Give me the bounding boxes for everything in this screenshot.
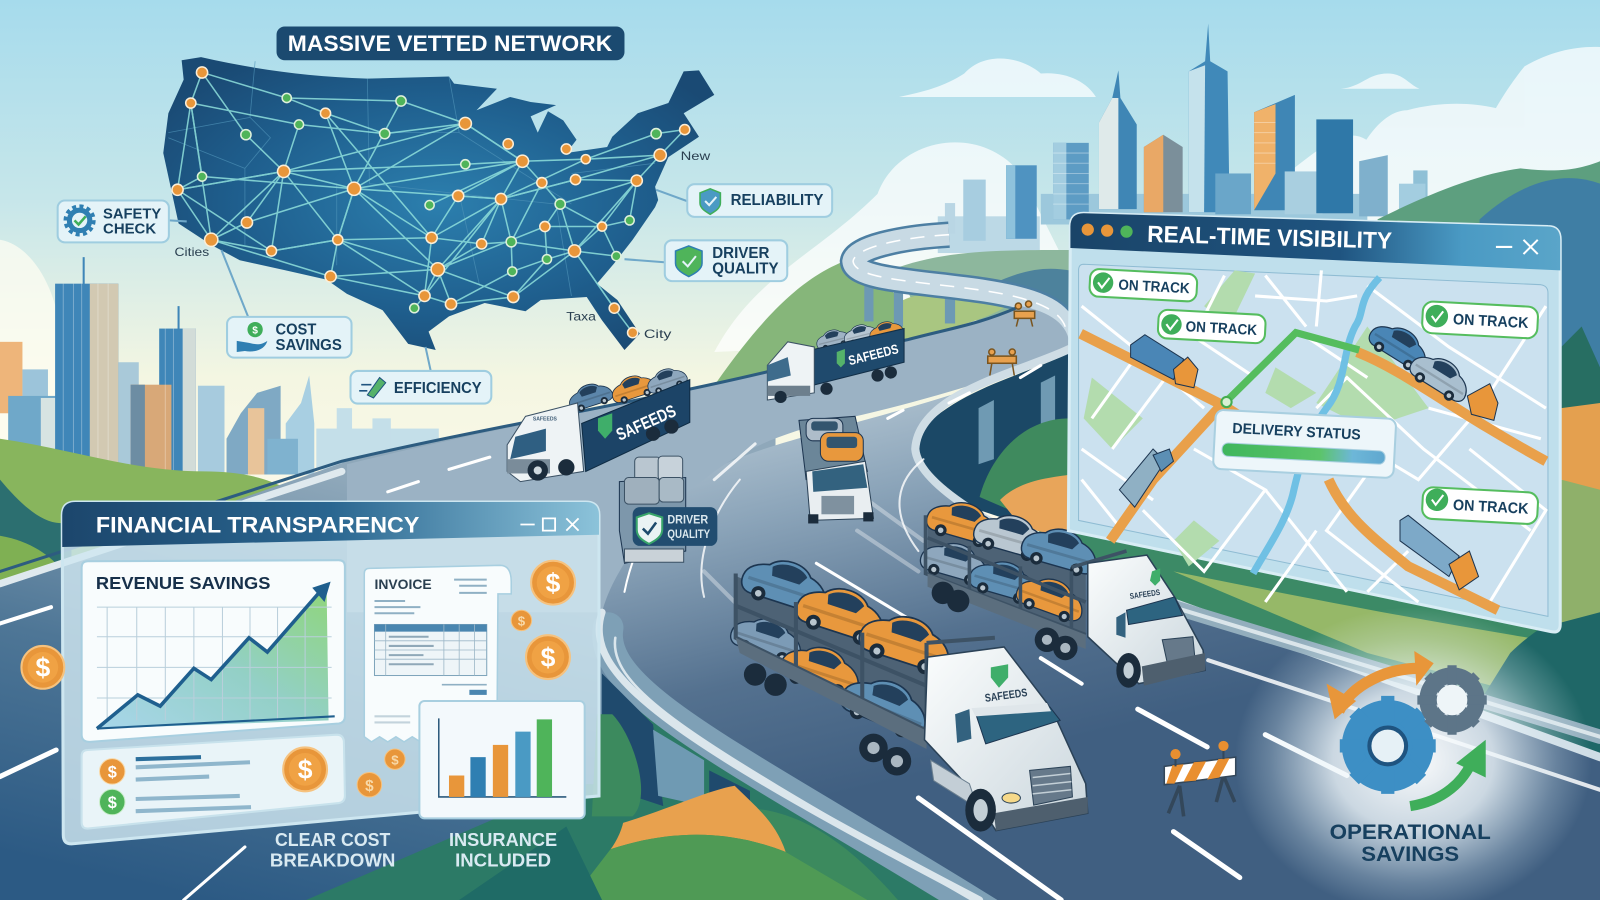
coin: $ [518,614,526,629]
ground below the overpass [306,653,1020,900]
left green hill [0,439,327,633]
tag: on track 3: ON TRACK [1453,311,1529,332]
coin: $ [391,752,399,767]
window header [1070,213,1560,270]
icon: gray gear [1417,665,1487,735]
coin [357,772,382,797]
tag: on track 3 [1422,301,1538,339]
truck: lower on map [1400,515,1479,590]
green route [1227,333,1359,401]
truck: right car carrier: SAFEEDS [1129,588,1161,601]
heading: operational savings: OPERATIONAL [1330,820,1491,844]
label: clear cost breakdown [270,829,395,870]
truck: large front carrier [727,549,1088,832]
icon: blue gear [1340,696,1436,794]
callout: efficiency: EFFICIENCY [394,380,482,397]
truck: upper distant carrier [767,318,905,403]
callout: reliability [687,184,832,217]
city labels: Cities [174,245,209,259]
label: insurance included: INCLUDED [455,849,551,870]
callout: safety check: CHECK [103,222,156,238]
city labels: New [681,149,710,163]
overpass supports [602,673,750,816]
heading: massive vetted network [277,27,624,60]
panel: massive vetted network map [163,57,714,370]
panel: operational savings [1235,607,1592,900]
callout: cost savings: COST [276,322,317,339]
card: cost lines: $ [108,764,117,782]
callout: cost savings [227,317,352,358]
skyline: left city [0,257,439,474]
window dots [1082,223,1133,238]
truck: carrier on map [1364,315,1498,420]
callout: safety check: SAFETY [103,206,161,222]
panel: financial transparency [62,502,599,844]
card: bar chart [419,701,585,818]
card: cost lines: $ [298,755,313,785]
road edge rails [0,306,1600,900]
window controls [520,518,579,531]
label: insurance included [449,829,557,870]
heading: real-time visibility: REAL-TIME VISIBILITY [1147,221,1393,254]
right hillside behind panel [969,327,1600,806]
card: cost lines [82,735,345,829]
coin on road: $ [35,653,50,683]
card: invoice [364,565,511,742]
callout: driver quality: DRIVER [712,245,769,262]
window header [62,502,599,547]
coin [385,749,405,769]
tag: on track 4: ON TRACK [1453,497,1529,518]
tag: on track 4 [1422,487,1538,524]
coin [531,561,575,605]
card: cost lines: $ [108,794,117,812]
delivery status card [1213,410,1396,478]
tag: driver quality [633,507,717,546]
foreground hill [306,714,898,900]
window frame [1068,213,1560,632]
truck: upper distant carrier: SAFEEDS [847,341,900,368]
city labels: Taxa [566,309,596,323]
truck: SAFEEDS navy trailer: SAFEEDS [533,416,558,422]
callout: cost savings: SAVINGS [276,337,342,354]
tag: on track 2: ON TRACK [1185,319,1258,339]
truck: blue box on map [1131,335,1198,388]
coin on road [21,646,64,689]
state borders [168,61,655,296]
barrier figures on road [988,301,1035,376]
truck: right car carrier [917,494,1205,688]
coin [511,610,532,631]
heading: operational savings [1330,820,1491,866]
truck: SAFEEDS navy trailer [507,363,690,482]
window controls [1496,240,1538,254]
icon: orange cycle arrow [1327,651,1434,719]
tag: on track 2 [1157,309,1266,344]
clouds [0,47,1600,469]
coin: $ [546,568,561,598]
city labels: City [644,327,673,341]
label: clear cost breakdown: CLEAR COST [275,829,391,850]
coin: $ [365,778,374,795]
callout: driver quality: QUALITY [712,260,779,277]
map view [1079,264,1548,616]
orange routes [1081,334,1546,610]
window frame [62,502,599,844]
map of the USA [163,57,714,350]
callout: efficiency [351,371,491,404]
network nodes [172,67,690,338]
lane markings [0,365,1600,900]
icon: green cycle arrow [1410,740,1486,806]
heading: massive vetted network: MASSIVE VETTED NETWORK [288,31,612,56]
white streets [1082,270,1546,602]
river [1253,278,1380,573]
tag: on track 1: ON TRACK [1118,278,1190,297]
card: revenue savings chart [82,560,345,742]
callout: driver quality [665,240,787,281]
logo: SAFEEDS shield [984,664,1029,705]
heading: financial transparency: FINANCIAL TRANSPARENCY [96,513,419,538]
dark underside below the curving road [908,352,1071,541]
logo: SAFEEDS shield: SAFEEDS [984,687,1029,705]
callout: reliability: RELIABILITY [731,192,823,209]
delivery status card: DELIVERY STATUS [1232,421,1361,444]
card: invoice: INVOICE [374,577,432,592]
connectors [169,190,687,370]
green areas [1084,270,1429,566]
main curving highway [601,345,1600,900]
tag: driver quality: QUALITY [667,528,710,541]
overpass: winding upper road [853,235,1067,352]
panel: real-time visibility [1068,213,1560,632]
skyline: right city [938,23,1428,253]
city labels [174,149,710,341]
label: clear cost breakdown: BREAKDOWN [270,849,395,870]
road merge surface [347,306,1070,612]
truck: carrier facing viewer [799,416,873,523]
heading: operational savings: SAVINGS [1361,842,1459,866]
coin [526,635,570,679]
hills behind the highway [709,161,1600,429]
truck: gray on map [1119,449,1173,507]
tag: driver quality: DRIVER [667,513,709,526]
card: revenue savings chart: REVENUE SAVINGS [96,573,271,593]
truck: SAFEEDS navy trailer: SAFEEDS [613,401,679,445]
left road surface [0,376,776,900]
truck: rear carrier with driver quality tag [619,456,717,563]
coin: $ [541,642,556,672]
callout: cost savings: $ [252,326,258,337]
network links [178,72,685,333]
callout: safety check [58,201,169,242]
barrier [1164,741,1236,816]
label: insurance included: INSURANCE [449,829,557,850]
tag: on track 1 [1089,269,1198,302]
